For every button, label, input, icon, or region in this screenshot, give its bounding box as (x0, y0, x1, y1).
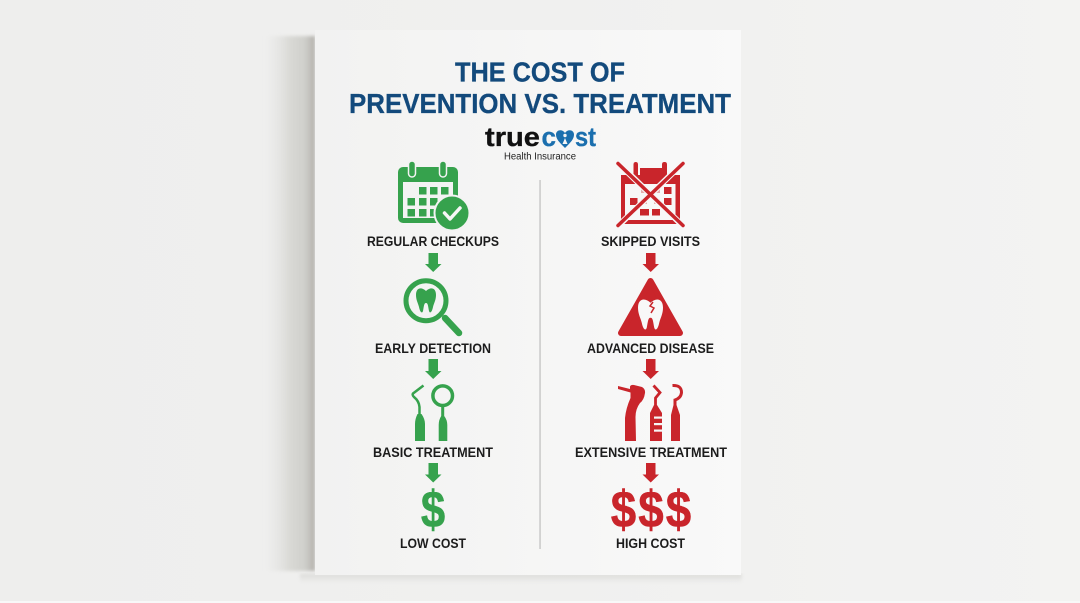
icon: warning triangle with cracked tooth (621, 281, 680, 333)
label: regular checkups: REGULAR CHECKUPS (367, 234, 499, 249)
arrow (425, 463, 442, 482)
icon: extensive dental tools (618, 385, 682, 441)
logo: truecost health insurance: Health Insurance (504, 152, 576, 162)
arrow (642, 359, 659, 379)
label: extensive treatment: EXTENSIVE TREATMENT (575, 445, 728, 460)
title: PREVENTION VS. TREATMENT (349, 88, 731, 119)
icon: single dollar: $ (421, 482, 445, 539)
label: high cost: HIGH COST (616, 536, 686, 551)
label: early detection: EARLY DETECTION (375, 341, 491, 356)
panel: poster (315, 30, 741, 575)
icon: dental tools (413, 386, 453, 441)
title (349, 56, 731, 119)
arrow (425, 253, 442, 272)
icon: three dollars (611, 481, 691, 539)
column: prevention path (367, 161, 499, 551)
icon: three dollars: $ (638, 481, 664, 539)
label: low cost: LOW COST (400, 536, 467, 551)
logo: truecost health insurance: st (575, 122, 596, 152)
logo: truecost health insurance: c (542, 122, 556, 152)
arrow (425, 359, 442, 379)
label: skipped visits: SKIPPED VISITS (601, 234, 700, 249)
logo: truecost health insurance: true (485, 122, 540, 152)
label: basic treatment: BASIC TREATMENT (373, 445, 494, 460)
icon: three dollars: $ (666, 481, 691, 539)
label: advanced disease: ADVANCED DISEASE (587, 341, 714, 356)
icon: magnifier with tooth (406, 281, 459, 333)
logo: truecost health insurance (485, 122, 596, 162)
arrow (642, 463, 659, 482)
icon: calendar with check (398, 161, 470, 230)
icon: crossed-out calendar (618, 162, 683, 226)
icon: three dollars: $ (611, 481, 636, 539)
title: THE COST OF (455, 56, 625, 88)
column: treatment path (575, 162, 728, 551)
arrow (642, 253, 659, 272)
